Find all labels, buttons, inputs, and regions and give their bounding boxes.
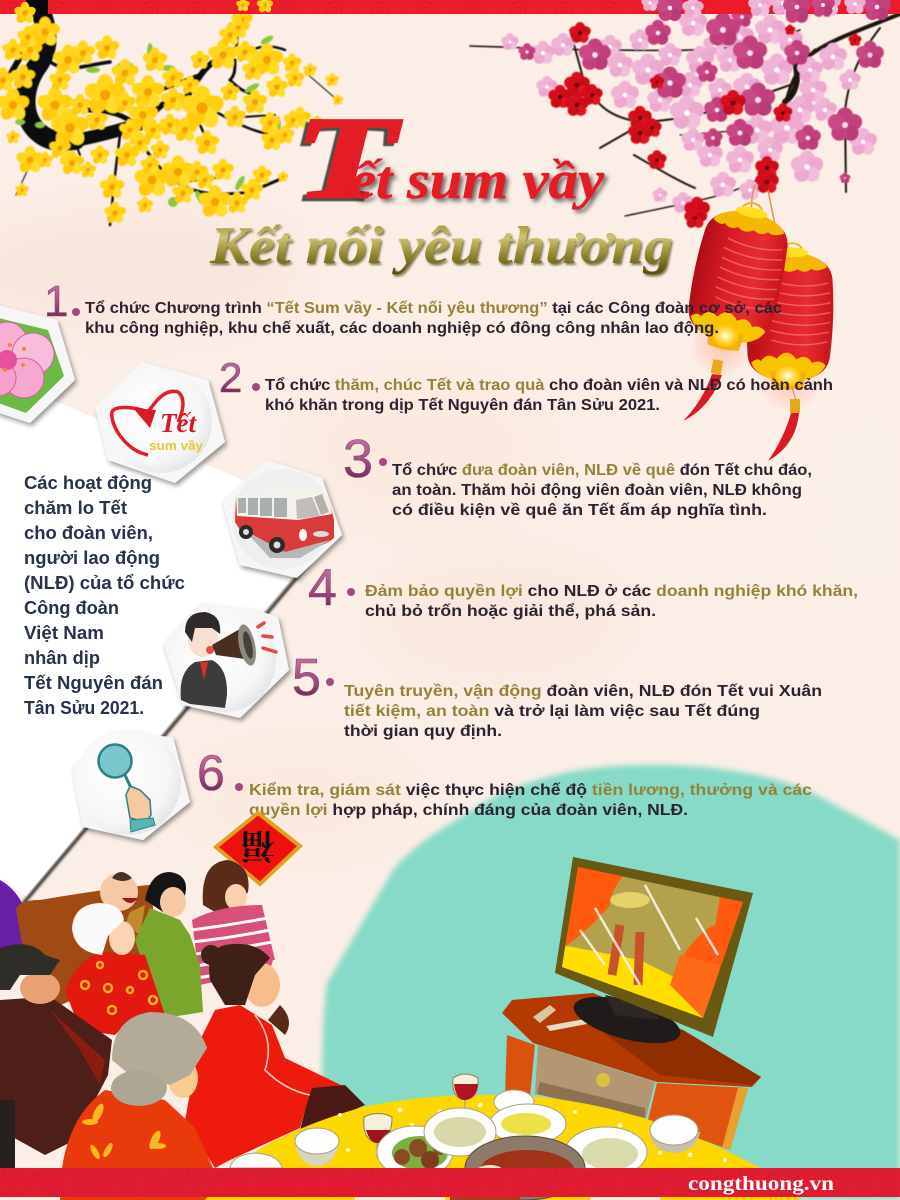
left description text: Tân Sửu 2021.	[24, 698, 144, 718]
item 3 text: Tổ chức đưa đoàn viên, NLĐ về quê đón Tết chu đáo,	[392, 462, 812, 479]
left description text: Việt Nam	[24, 623, 104, 643]
dark pink flowers	[517, 0, 893, 184]
hexagon 1: blossom	[0, 303, 75, 423]
wine glasses	[364, 1074, 478, 1158]
lantern: back (right)	[744, 242, 836, 461]
man	[181, 612, 227, 708]
subtitle: Kết nối yêu thương: Kết nối yêu thương	[209, 217, 673, 275]
logo word Tết: Tết	[160, 408, 197, 438]
woman in red jacket	[185, 944, 365, 1168]
red flowers	[547, 22, 862, 230]
pink flower	[0, 322, 54, 398]
item 5 text: tiết kiệm, an toàn và trở lại làm việc sau Tết đúng	[344, 703, 760, 720]
number 6: 6	[197, 745, 225, 801]
baby head	[100, 872, 145, 935]
yellow apricot blossom branch	[0, 0, 344, 225]
hexagon 4: man with megaphone	[163, 603, 289, 718]
title: Tết sum vầy	[294, 94, 605, 223]
remote	[546, 1019, 587, 1031]
teal backdrop shape	[322, 765, 900, 1200]
item 4 text: Đảm bảo quyền lợi cho NLĐ ở các doanh nghiệp khó khăn,	[365, 583, 858, 600]
site name: congthuong.vn	[688, 1173, 834, 1195]
left description text: Các hoạt động	[24, 473, 152, 493]
family group	[0, 860, 365, 1200]
screen	[562, 867, 743, 1018]
item 5	[292, 649, 822, 740]
grandmother in red dress	[65, 903, 165, 1035]
branch wood	[470, 14, 900, 216]
purple corner shape	[0, 880, 26, 950]
item 4 text	[365, 583, 858, 620]
yellow flowers	[0, 0, 344, 225]
item 5 text	[344, 683, 822, 740]
table dots	[338, 1102, 727, 1162]
phone	[533, 1005, 556, 1023]
cabinet top	[502, 993, 761, 1087]
under-band scraps	[355, 1196, 660, 1200]
hexagon 2: Tết sum vầy logo	[95, 362, 225, 483]
hand	[126, 786, 155, 832]
item 6 text: Kiểm tra, giám sát việc thực hiện chế độ tiền lương, thưởng và các	[249, 782, 812, 799]
hexagon 3: bus	[222, 460, 342, 578]
title initial T: T	[294, 94, 402, 223]
left description text: cho đoàn viên,	[24, 523, 153, 543]
title remainder: ết sum vầy	[350, 150, 605, 210]
red diamond good-fortune sign	[216, 813, 300, 884]
number 5: 5	[292, 649, 321, 707]
plate of meatballs	[377, 1126, 453, 1178]
big fish dish	[465, 1136, 585, 1200]
plate of noodles	[565, 1127, 647, 1177]
TV cabinet	[502, 993, 761, 1150]
bus	[235, 489, 334, 558]
bowls	[230, 1090, 700, 1168]
stand base	[569, 987, 685, 1053]
left description text: Công đoàn	[24, 598, 119, 618]
item 1 text: khu công nghiệp, khu chế xuất, các doanh nghiệp có đông công nhân lao động.	[85, 320, 719, 337]
item 2	[219, 354, 833, 414]
plate of greens	[490, 1104, 566, 1144]
number 4: 4	[308, 559, 337, 617]
cabinet right door	[648, 1083, 748, 1150]
lantern strings	[751, 185, 790, 250]
white diagonal panel	[0, 385, 315, 905]
item 2 text	[265, 377, 833, 414]
frame	[555, 857, 753, 1037]
item 4	[308, 559, 858, 620]
pink plum blossom branch	[470, 0, 900, 230]
item 3	[343, 429, 812, 519]
number 1: 1	[44, 277, 68, 326]
item 2 text: Tổ chức thăm, chúc Tết và trao quà cho đoàn viên và NLĐ có hoàn cảnh	[265, 377, 833, 394]
bottom red band	[0, 1168, 900, 1197]
redraw of branch tips over band	[13, 0, 893, 25]
lantern: front (left)	[680, 194, 797, 421]
sofa	[16, 885, 160, 1010]
green hexagon	[0, 316, 64, 413]
item 5 text: Tuyên truyền, vận động đoàn viên, NLĐ đón Tết vui Xuân	[344, 683, 822, 700]
item 6 text: quyền lợi hợp pháp, chính đáng của đoàn viên, NLĐ.	[249, 802, 688, 819]
left description text: chăm lo Tết	[24, 498, 127, 518]
left description text: người lao động	[24, 548, 160, 568]
item 3 text	[392, 462, 812, 519]
cabinet glass	[535, 1045, 655, 1118]
left description text	[24, 473, 185, 718]
left description text: nhân dịp	[24, 648, 100, 668]
woman with grey hair	[60, 1012, 215, 1200]
item 4 text: chủ bỏ trốn hoặc giải thể, phá sản.	[365, 603, 656, 620]
man in green jacket	[135, 872, 203, 1018]
hexagon 5: magnifier	[72, 729, 190, 840]
top red band	[0, 0, 900, 14]
item 5 text: thời gian quy định.	[344, 723, 502, 740]
item 6 text	[249, 782, 812, 819]
megaphone	[212, 623, 259, 667]
girl in striped sweater	[192, 860, 275, 985]
red diamond good-fortune sign: 福	[241, 824, 275, 873]
left description text: (NLĐ) của tổ chức	[24, 573, 185, 593]
item 1 text: Tổ chức Chương trình “Tết Sum vầy - Kết nối yêu thương” tại các Công đoàn cơ sở, các	[85, 300, 782, 317]
branch wood	[10, 0, 335, 225]
leaves	[15, 34, 281, 207]
item 6	[197, 745, 812, 819]
number 3: 3	[343, 429, 373, 489]
heart ribbon	[112, 391, 183, 455]
item 1	[44, 277, 782, 337]
television	[555, 857, 753, 1044]
number 2: 2	[219, 354, 242, 401]
sound lines	[258, 623, 276, 652]
item 2 text: khó khăn trong dịp Tết Nguyên đán Tân Sửu 2021.	[265, 397, 660, 414]
cabinet left door	[505, 1035, 535, 1097]
banquet table	[205, 1074, 800, 1200]
man in brown coat	[0, 944, 112, 1168]
item 3 text: an toàn. Thăm hỏi động viên đoàn viên, NLĐ không	[392, 482, 802, 499]
logo words sum vầy: sum vầy	[149, 438, 204, 453]
light flowers	[500, 0, 879, 215]
magnifying glass	[98, 744, 132, 790]
plate of dumplings	[424, 1108, 496, 1156]
item 1 text	[85, 300, 782, 337]
item 3 text: có điều kiện về quê ăn Tết ấm áp nghĩa tình.	[392, 502, 767, 519]
left description text: Tết Nguyên đán	[24, 673, 163, 693]
